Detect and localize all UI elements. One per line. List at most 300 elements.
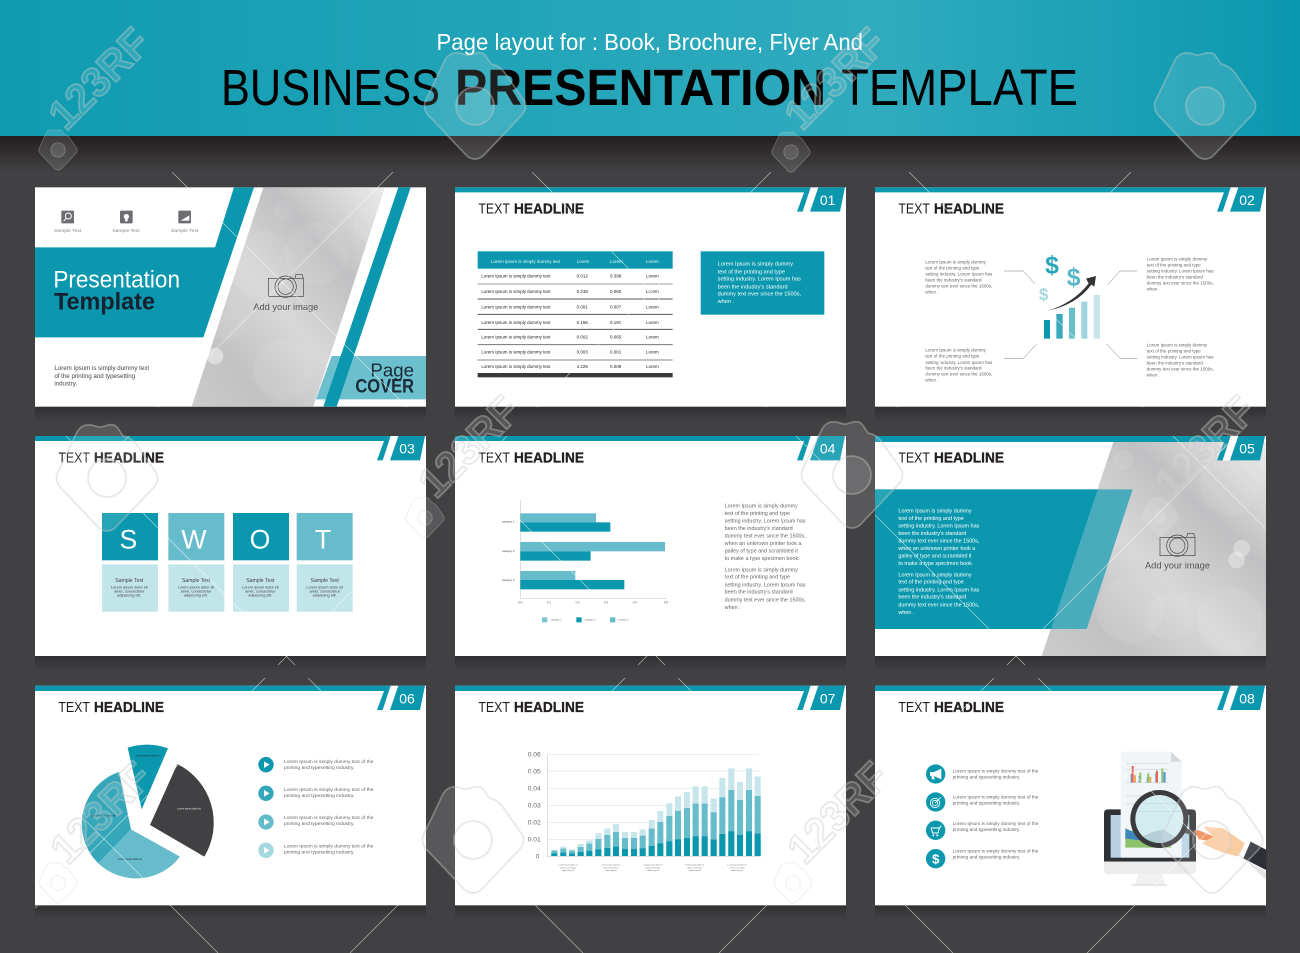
- icon labels: Sample Text: [112, 228, 140, 234]
- growth arrow: [1047, 276, 1096, 311]
- cover title: [53, 267, 180, 316]
- headline: HEADLINE: [514, 450, 584, 466]
- data table: Lorem: [646, 320, 659, 325]
- stacked chart: Lorem ipsum dolor sit: [601, 864, 621, 867]
- band body text: galley of type and scrambled it: [898, 554, 972, 560]
- body text: Lorem Ipsum is simply dummy: [725, 503, 798, 509]
- small logo and mark row two centre: 123RF: [409, 387, 529, 506]
- bar chart: 03: [604, 599, 609, 604]
- page number tag: 02: [1239, 192, 1255, 208]
- headline: HEADLINE: [94, 450, 164, 466]
- data table: 0.007: [610, 305, 622, 310]
- band body text: text of the printing and type: [898, 516, 964, 522]
- icon: camera: [268, 274, 303, 297]
- main title: TEMPLATE: [841, 59, 1078, 116]
- stacked chart: 0.04: [528, 786, 541, 793]
- stacked chart: 0.06: [528, 751, 541, 758]
- body text: been the industry's standard: [725, 526, 793, 532]
- cover body text: of the printing and typesetting: [54, 373, 136, 380]
- teal text box: dummy text ever since the 1500s,: [718, 292, 802, 298]
- cover body text: Lorem Ipsum is simply dummy text: [54, 365, 149, 372]
- hand and sleeve: [1202, 827, 1267, 880]
- data table: Lorem Ipsum is simply dummy text: [491, 259, 561, 264]
- data table: 0.001: [610, 349, 622, 354]
- band body text: when .: [897, 610, 915, 616]
- data table: Lorem Ipsum is simply dummy text: [481, 273, 551, 278]
- lower left note: been the industry's standard: [925, 366, 982, 371]
- lower left note: [925, 348, 993, 383]
- icon labels: [54, 228, 199, 234]
- upper left note: [925, 260, 993, 295]
- S column: [102, 513, 158, 612]
- page number tag: 08: [1239, 690, 1255, 706]
- top bar: [875, 187, 1231, 212]
- icon: camera: [1160, 533, 1195, 556]
- data table: Lorem: [646, 349, 659, 354]
- stacked chart: amet, consectetur: [560, 866, 576, 869]
- top bar: [35, 686, 391, 710]
- stacked chart: 0: [536, 854, 540, 861]
- chart legend: category 1: [551, 619, 562, 622]
- data table: 0.225: [577, 364, 588, 369]
- cover body text: industry.: [54, 381, 77, 388]
- top bar: [455, 686, 811, 710]
- data table: Lorem: [646, 364, 659, 369]
- item: cart: printing and typesetting industry.: [953, 827, 1020, 833]
- icon labels: Sample Text: [171, 228, 199, 234]
- item: target: Lorem Ipsum is simply dummy text of the: [953, 795, 1039, 801]
- body text: dummy text ever since the 1500s,: [725, 597, 806, 603]
- large logo row two centre: [802, 422, 902, 528]
- S column: S: [119, 524, 137, 554]
- page number tag: [1230, 686, 1265, 710]
- bar chart: 05: [664, 599, 669, 604]
- list item 1: [258, 757, 374, 772]
- data table: 0.065: [610, 335, 622, 340]
- headline: TEXT: [898, 450, 930, 466]
- small logo and mark row three centre: 123RF: [778, 753, 898, 872]
- lower right note: when .: [1147, 372, 1160, 377]
- T column: Sample Text: [311, 578, 339, 584]
- list item 1: printing and typesetting industry.: [284, 765, 354, 771]
- lower right note: setting industry. Lorem Ipsum has: [1147, 354, 1214, 359]
- band body text: [897, 508, 980, 616]
- tag gap: [1223, 436, 1238, 460]
- item: cart: [926, 821, 1039, 840]
- page number tag: 07: [820, 690, 836, 706]
- top bar: [875, 686, 1231, 710]
- top bar: [455, 436, 811, 460]
- bar chart: 01: [547, 599, 552, 604]
- diagonal stripe: [323, 187, 411, 407]
- slide 06: pie chart: [35, 686, 426, 905]
- body text: when .: [724, 605, 741, 611]
- connector lines: [1004, 271, 1137, 358]
- headline: [898, 700, 1004, 716]
- data table: 0.398: [610, 273, 622, 278]
- monitor: [1104, 809, 1196, 886]
- cover title: Template: [54, 289, 155, 316]
- growth bars: [1044, 295, 1100, 339]
- headline: [898, 450, 1004, 466]
- headline: HEADLINE: [934, 201, 1004, 217]
- slide drop shadows: [35, 407, 1266, 919]
- pie chart: Lorem ipsum dolor sit: [118, 858, 142, 861]
- T column: [297, 513, 353, 612]
- list item 3: printing and typesetting industry.: [284, 821, 354, 827]
- stacked chart: Lorem ipsum dolor sit: [644, 864, 663, 867]
- data table: Lorem: [646, 335, 659, 340]
- data table: 0.003: [577, 349, 588, 354]
- list item 4: [258, 843, 374, 858]
- band body text: been the industry's standard: [898, 531, 966, 537]
- chart legend: category 2: [585, 619, 596, 622]
- data table: [478, 251, 673, 377]
- shadow band under header: [0, 136, 1300, 172]
- cover title: Presentation: [53, 267, 180, 294]
- band body text: when an unknown printer took a: [897, 546, 976, 552]
- page number tag: 03: [399, 441, 415, 457]
- chart legend: category 3: [618, 619, 629, 622]
- item: megaphone: [926, 764, 1039, 784]
- S column: amet, consectetur: [114, 589, 145, 593]
- cover body text: [54, 365, 149, 388]
- body text: text of the printing and type: [725, 511, 790, 517]
- teal text box: Lorem Ipsum is simply dummy: [718, 262, 793, 268]
- data table: Lorem: [646, 289, 659, 294]
- headline: [58, 450, 164, 466]
- photo placeholder: [1042, 442, 1266, 656]
- teal text box: [701, 251, 824, 315]
- upper left note: been the industry's standard: [925, 278, 982, 283]
- small logo and mark top left: 123RF: [39, 19, 159, 138]
- T column: Lorem ipsum dolor sit: [306, 585, 344, 589]
- W column: [168, 513, 224, 612]
- list item 3: Lorem Ipsum is simply dummy text of the: [284, 815, 374, 821]
- bar chart: 00: [518, 599, 523, 604]
- stacked chart: 0.02: [528, 820, 541, 827]
- data table: 0.238: [577, 289, 588, 294]
- band body text: been the industry's standard: [898, 595, 966, 601]
- stacked chart: adipiscing elit: [689, 869, 701, 872]
- W column: Lorem ipsum dolor sit: [178, 585, 215, 589]
- item: target: printing and typesetting industry.: [953, 801, 1020, 807]
- page number tag: 06: [399, 690, 415, 706]
- large logo row three right: [1162, 787, 1262, 893]
- item: dollar: Lorem Ipsum is simply dummy text of the: [953, 848, 1039, 854]
- S column: Lorem ipsum dolor sit: [111, 585, 149, 589]
- slide 07: stacked bar chart: [455, 686, 846, 905]
- T column: adipiscing elit.: [313, 593, 337, 597]
- data table: 0.156: [577, 320, 588, 325]
- teal text band: [875, 489, 1133, 629]
- headline: TEXT: [478, 450, 510, 466]
- lower right note: [1147, 342, 1214, 377]
- lower left note: Lorem Ipsum is simply dummy: [925, 348, 987, 353]
- headline: [898, 201, 1004, 217]
- photo placeholder: [192, 187, 393, 407]
- band body text: to make a type specimen book.: [898, 561, 974, 567]
- S column: Sample Text: [115, 578, 144, 584]
- small logo and mark row two right: 123RF: [1145, 387, 1265, 506]
- dollar signs: $: [1045, 252, 1059, 279]
- headline: HEADLINE: [934, 450, 1004, 466]
- data table: 0.008: [610, 364, 622, 369]
- page cover label: COVER: [355, 377, 414, 398]
- W column: W: [181, 524, 207, 554]
- dollar signs: $: [1039, 285, 1049, 304]
- stacked chart: amet, consectetur: [645, 866, 661, 869]
- O column: Lorem ipsum dolor sit: [242, 585, 280, 589]
- page cover label: [355, 360, 414, 398]
- page number tag: 05: [1239, 441, 1255, 457]
- large logo row three centre: [422, 787, 524, 893]
- bar chart: 04: [632, 599, 638, 604]
- top bar: [875, 436, 1231, 460]
- lower left note: dummy text ever since the 1500s,: [925, 372, 992, 377]
- body text: when an unknown printer took a: [724, 541, 803, 547]
- list item 4: printing and typesetting industry.: [284, 850, 354, 856]
- data table: Lorem Ipsum is simply dummy text: [481, 349, 551, 354]
- page number tag: [1230, 436, 1265, 460]
- stacked chart: adipiscing elit: [647, 869, 659, 872]
- main title: BUSINESS: [221, 59, 440, 116]
- headline: TEXT: [898, 201, 930, 217]
- body text: setting industry. Lorem Ipsum has: [725, 518, 806, 524]
- stacked chart: amet, consectetur: [687, 866, 703, 869]
- S column: adipiscing elit.: [117, 593, 141, 597]
- stacked chart: Lorem ipsum dolor sit: [685, 864, 705, 867]
- stacked chart: [528, 751, 761, 872]
- body text: text of the printing and type: [725, 575, 790, 581]
- headline: TEXT: [58, 700, 90, 716]
- lower right note: been the industry's standard: [1147, 360, 1203, 365]
- headline: [478, 700, 584, 716]
- page number tag: 01: [820, 192, 836, 208]
- slide 03: SWOT: [35, 436, 426, 656]
- stacked chart: 0.05: [528, 768, 541, 775]
- band body text: setting industry. Lorem Ipsum has: [898, 587, 980, 593]
- stacked chart: 0.03: [528, 802, 541, 809]
- headline: [478, 201, 584, 217]
- top bar: [455, 187, 811, 212]
- data table: Lorem Ipsum is simply dummy text: [481, 305, 551, 310]
- upper left note: dummy text ever since the 1500s,: [925, 283, 992, 288]
- stacked chart: adipiscing elit: [605, 869, 617, 872]
- slide 02: growth graphic: [875, 187, 1266, 407]
- icon: chart: [178, 211, 191, 223]
- lower right note: Lorem Ipsum is simply dummy: [1147, 342, 1208, 347]
- data table: Lorem: [646, 273, 659, 278]
- lower left note: setting industry. Lorem Ipsum has: [925, 360, 993, 365]
- icon: idea: [120, 211, 133, 223]
- item: megaphone: printing and typesetting industry.: [953, 774, 1020, 780]
- item: cart: Lorem Ipsum is simply dummy text of the: [953, 821, 1039, 827]
- data table: 0.002: [577, 335, 588, 340]
- header banner: [0, 0, 1300, 136]
- top bar: [35, 436, 391, 460]
- upper left note: setting industry. Lorem Ipsum has: [925, 272, 993, 277]
- dollar signs: [1039, 252, 1081, 304]
- band body text: text of the printing and type: [898, 580, 964, 586]
- list item 1: Lorem Ipsum is simply dummy text of the: [284, 759, 374, 765]
- pie chart: Lorem ipsum dolor sit: [177, 808, 201, 811]
- chart legend: [542, 617, 629, 622]
- item: dollar: printing and typesetting industry.: [953, 854, 1020, 860]
- stacked chart: Lorem ipsum dolor sit: [559, 864, 578, 867]
- slide 01: table: [455, 187, 846, 407]
- W column: Sample Text: [182, 578, 211, 584]
- list item 3: [258, 814, 374, 830]
- bar chart: category 3: [502, 578, 515, 582]
- list item 2: [258, 786, 374, 801]
- data table: 0.060: [610, 289, 622, 294]
- item: target: [926, 792, 1039, 812]
- list item 2: Lorem Ipsum is simply dummy text of the: [284, 787, 374, 793]
- data table: Lorem: [577, 259, 590, 264]
- upper left note: text of the printing and type: [925, 266, 980, 271]
- O column: amet, consectetur: [245, 589, 276, 593]
- large logo top centre: [424, 53, 526, 159]
- bar chart: category 1: [502, 520, 515, 524]
- page number tag: [810, 436, 845, 460]
- data table: Lorem: [610, 259, 623, 264]
- band body text: Lorem Ipsum is simply dummy: [898, 572, 972, 578]
- page number tag: [810, 187, 845, 212]
- main title: PRESENTATION: [455, 59, 826, 116]
- pie chart: [82, 745, 214, 878]
- headline: [58, 700, 164, 716]
- list item 2: printing and typesetting industry.: [284, 793, 354, 799]
- page number tag: [810, 686, 845, 710]
- item: megaphone: Lorem Ipsum is simply dummy text of the: [953, 768, 1039, 774]
- large logo top right: [1154, 53, 1256, 159]
- bar chart: category 2: [502, 549, 515, 553]
- upper right note: text of the printing and type: [1147, 263, 1201, 268]
- data table: Lorem Ipsum is simply dummy text: [481, 320, 551, 325]
- lower right note: dummy text ever since the 1500s,: [1147, 366, 1214, 371]
- headline: TEXT: [58, 450, 90, 466]
- O column: [233, 513, 289, 612]
- body text: setting industry. Lorem Ipsum has: [725, 582, 806, 588]
- body text: been the industry's standard: [725, 590, 793, 596]
- document: [1121, 752, 1182, 858]
- band body text: Lorem Ipsum is simply dummy: [898, 508, 972, 514]
- subtitle: Page layout for : Book, Brochure, Flyer And: [436, 29, 863, 55]
- upper left note: when .: [925, 290, 939, 295]
- bar chart: 02: [575, 599, 581, 604]
- page cover label: Page: [370, 360, 414, 381]
- headline: [478, 450, 584, 466]
- teal text box: been the industry's standard: [718, 284, 788, 290]
- O column: O: [250, 524, 270, 554]
- item: dollar: $: [932, 851, 940, 866]
- stacked chart: adipiscing elit: [562, 869, 574, 872]
- bar chart: [502, 500, 669, 622]
- slide 04: horizontal bar chart: [455, 436, 846, 656]
- lower left note: when .: [925, 378, 939, 383]
- headline: HEADLINE: [934, 700, 1004, 716]
- list item 4: Lorem Ipsum is simply dummy text of the: [284, 844, 374, 850]
- T column: amet, consectetur: [309, 589, 341, 593]
- small logo and mark top centre: 123RF: [775, 19, 895, 138]
- page number tag: 04: [820, 441, 836, 457]
- upper right note: setting industry. Lorem Ipsum has: [1147, 269, 1214, 274]
- lower left note: text of the printing and type: [925, 354, 980, 359]
- stacked chart: amet, consectetur: [603, 866, 619, 869]
- large logo row two left: [56, 425, 158, 531]
- data table: Lorem: [646, 259, 659, 264]
- O column: adipiscing elit.: [248, 593, 272, 597]
- lower right note: text of the printing and type: [1147, 348, 1201, 353]
- upper right note: dummy text ever since the 1500s,: [1147, 281, 1214, 286]
- data table: 0.012: [577, 273, 588, 278]
- icon: search: [61, 211, 74, 223]
- band body text: dummy text ever since the 1500s,: [898, 538, 980, 544]
- icon labels: Sample Text: [54, 228, 82, 234]
- headline: TEXT: [478, 700, 510, 716]
- upper right note: Lorem Ipsum is simply dummy: [1147, 257, 1208, 262]
- stacked chart: 0.01: [528, 837, 541, 844]
- light teal label band: [316, 356, 426, 399]
- upper right note: when .: [1147, 287, 1160, 292]
- W column: adipiscing elit.: [184, 593, 208, 597]
- stacked chart: Lorem ipsum dolor sit: [728, 864, 747, 867]
- slide: page cover: [35, 187, 426, 407]
- data table: 0.192: [610, 320, 622, 325]
- body text: [724, 503, 806, 611]
- data table: Lorem Ipsum is simply dummy text: [481, 335, 551, 340]
- body text: Lorem Ipsum is simply dummy: [725, 567, 798, 573]
- page number tag: [390, 686, 425, 710]
- upper left note: Lorem Ipsum is simply dummy: [925, 260, 987, 265]
- teal text box: text of the printing and type: [718, 269, 785, 275]
- data table: Lorem Ipsum is simply dummy text: [481, 364, 551, 369]
- page number tag: [1230, 187, 1265, 212]
- band body text: dummy text ever since the 1500s,: [898, 602, 980, 608]
- magnifier: [1130, 790, 1214, 850]
- band body text: setting industry. Lorem Ipsum has: [898, 523, 980, 529]
- teal text box: when .: [717, 299, 735, 305]
- add image caption: Add your image: [1145, 561, 1210, 571]
- item: dollar: [926, 848, 1039, 868]
- pie chart: Lorem ipsum dolor sit: [136, 755, 160, 758]
- stacked chart: amet, consectetur: [729, 866, 745, 869]
- page number tag: [390, 436, 425, 460]
- teal text box: setting industry. Lorem Ipsum has: [718, 277, 801, 283]
- stacked chart: adipiscing elit: [731, 869, 743, 872]
- T column: T: [315, 524, 331, 554]
- upper right note: [1147, 257, 1214, 292]
- teal title band: [35, 187, 254, 337]
- headline: TEXT: [898, 700, 930, 716]
- data table: Lorem: [646, 305, 659, 310]
- headline: TEXT: [478, 201, 510, 217]
- small logo and mark row three left: 123RF: [41, 753, 161, 872]
- O column: Sample Text: [246, 578, 275, 584]
- body text: galley of type and scrambled it: [725, 548, 798, 554]
- slide 05: image and text: [875, 436, 1266, 656]
- slide 08: analysis illustration: [875, 686, 1267, 905]
- headline: HEADLINE: [514, 700, 584, 716]
- main title: [221, 59, 1078, 116]
- body text: to make a type specimen book.: [725, 556, 800, 562]
- headline: HEADLINE: [94, 700, 164, 716]
- data table: Lorem Ipsum is simply dummy text: [481, 289, 551, 294]
- add image caption: Add your image: [253, 302, 318, 312]
- pie chart: Lorem ipsum dolor sit: [91, 815, 116, 818]
- dollar signs: $: [1067, 265, 1081, 292]
